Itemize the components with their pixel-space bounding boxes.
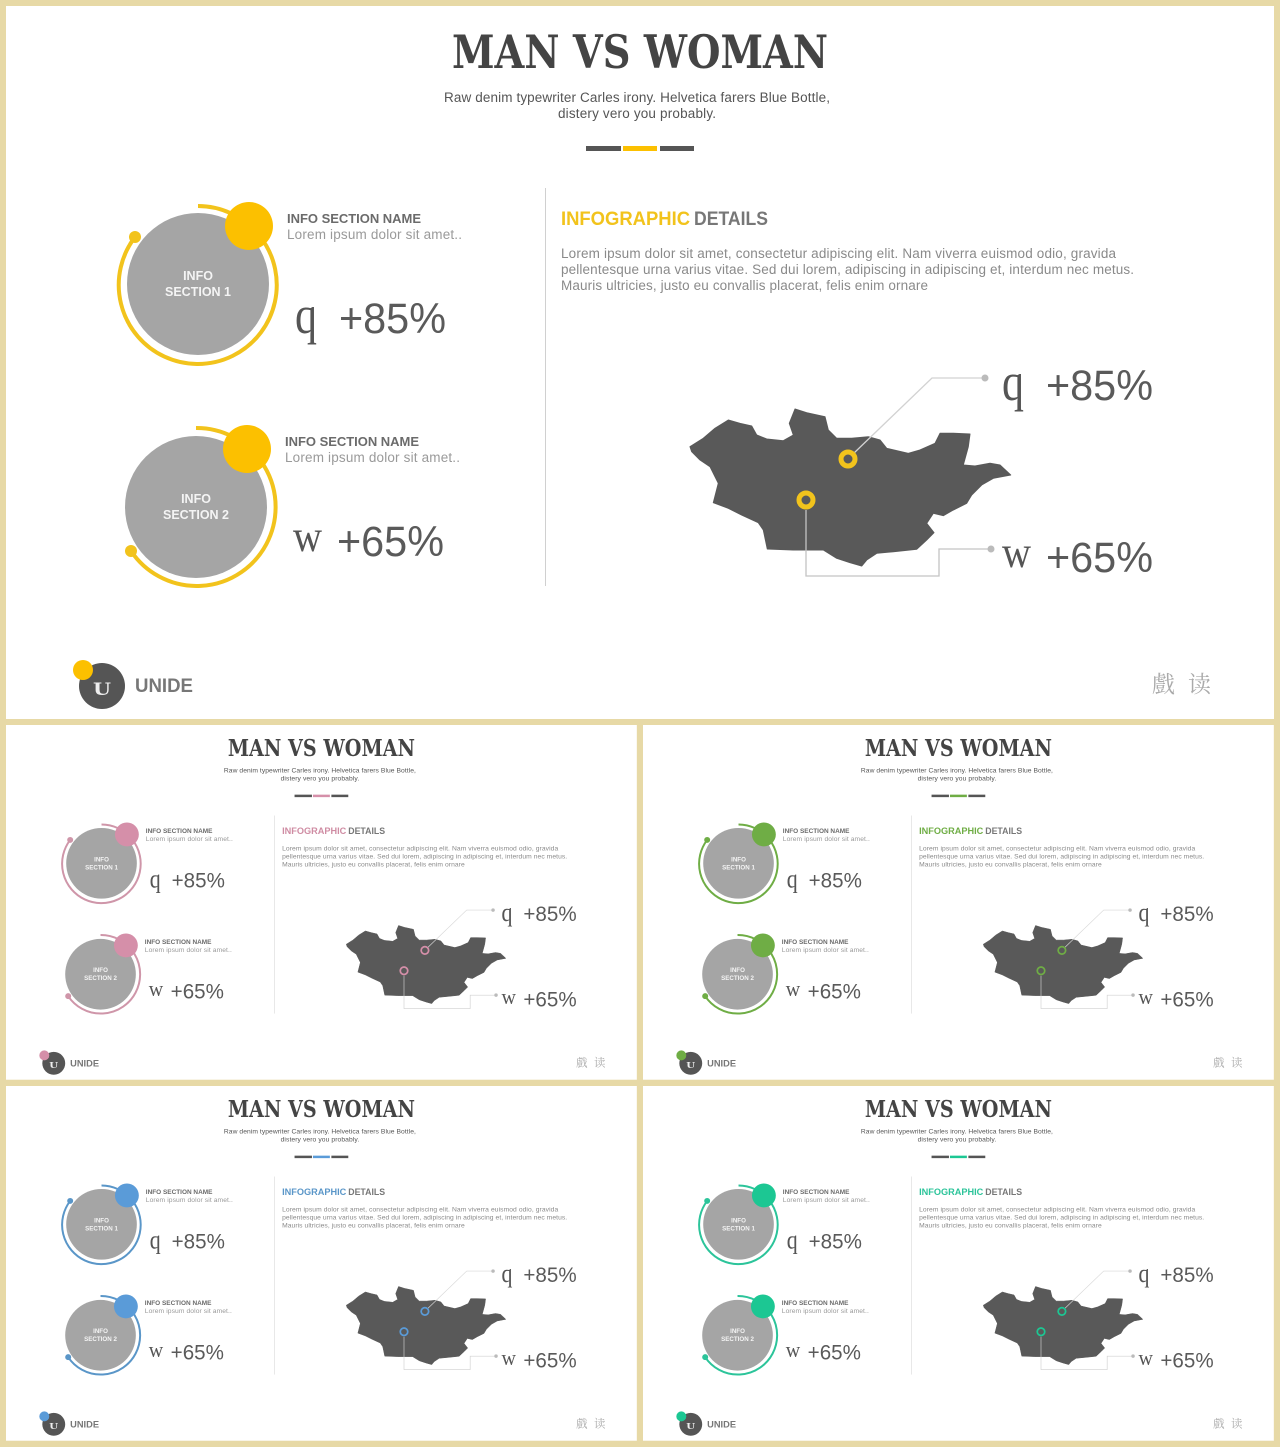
stat: q +85% (150, 864, 225, 894)
heading: infographic details (282, 826, 385, 837)
subtitle (224, 768, 416, 783)
text: section 1 name: Lorem ipsum dolor sit amet.. (783, 1197, 870, 1204)
text: section 2 name: INFO SECTION NAME (285, 434, 419, 449)
panel: yellow main slide (6, 6, 1274, 719)
text: section 2 name: INFO SECTION NAME (782, 939, 849, 946)
map stat: q +85%: q (1139, 897, 1149, 927)
text: section 2 name (782, 1300, 869, 1315)
circle: info section 1 (119, 202, 277, 364)
heading: infographic details: DETAILS (694, 209, 768, 230)
paragraph: pellentesque urna varius vitae. Sed dui lorem, adipiscing in adipiscing et, interdum nec metus. (282, 853, 567, 860)
subtitle (861, 768, 1053, 783)
map stat: q +85%: +85% (1046, 362, 1153, 410)
text: section 2 name (782, 939, 869, 954)
title accent bars (932, 795, 985, 797)
paragraph (919, 845, 1204, 868)
circle: info section 2: SECTION 2 (721, 1336, 754, 1343)
circle: info section 2: SECTION 2 (84, 975, 117, 982)
logo: UNIDE (707, 1419, 736, 1430)
map stat: w +65%: w (502, 1345, 516, 1370)
subtitle: Raw denim typewriter Carles irony. Helvetica farers Blue Bottle, (861, 1129, 1053, 1136)
stat: q +85% (787, 1225, 862, 1255)
circle: info section 2: INFO (93, 967, 108, 974)
marker: q (1058, 947, 1066, 954)
text: section 1 name: INFO SECTION NAME (146, 1189, 213, 1196)
map stat: w +65%: w (1139, 984, 1153, 1009)
subtitle (861, 1129, 1053, 1144)
text: section 1 name (287, 211, 462, 242)
stat: q +85%: +85% (339, 295, 446, 343)
stat: w +65%: +65% (337, 518, 444, 566)
map stat: q +85% (502, 1258, 577, 1288)
text: section 2 name: INFO SECTION NAME (145, 939, 212, 946)
text: section 1 name: Lorem ipsum dolor sit amet.. (146, 1197, 233, 1204)
circle: info section 1 (699, 823, 778, 903)
subtitle: Raw denim typewriter Carles irony. Helvetica farers Blue Bottle, (224, 1129, 416, 1136)
circle: info section 2: INFO (730, 967, 745, 974)
title accent bars (295, 795, 348, 797)
map stat: w +65% (1139, 1345, 1214, 1373)
footer text: 戲 读 (1213, 1415, 1243, 1431)
stat: q +85%: q (150, 1225, 161, 1255)
subtitle: distery vero you probably. (918, 1137, 996, 1144)
panel: blue slide (6, 1086, 637, 1441)
footer text: 戲 读 (576, 1054, 606, 1070)
map stat: w +65% (1139, 984, 1214, 1012)
subtitle (444, 90, 830, 121)
circle: info section 1: SECTION 1 (722, 864, 755, 871)
circle: info section 1: INFO (94, 1217, 109, 1224)
text: section 2 name: Lorem ipsum dolor sit amet.. (145, 1308, 232, 1315)
heading: infographic details (919, 826, 1022, 837)
logo (39, 1411, 99, 1436)
paragraph: Lorem ipsum dolor sit amet, consectetur adipiscing elit. Nam viverra euismod odio, gravida (919, 845, 1195, 852)
subtitle: distery vero you probably. (558, 106, 716, 121)
heading: infographic details: INFOGRAPHIC (919, 1187, 983, 1198)
stat: w +65% (293, 512, 444, 566)
marker: w (1037, 967, 1045, 974)
marker: w (799, 493, 813, 507)
circle: info section 2: INFO (181, 492, 211, 506)
callout line: q (427, 908, 495, 948)
title: MAN VS WOMAN (228, 1097, 415, 1123)
logo: U (93, 680, 111, 700)
logo: U (686, 1060, 696, 1070)
stat: q +85%: q (787, 1225, 798, 1255)
map stat: w +65%: w (502, 984, 516, 1009)
text: section 1 name: INFO SECTION NAME (287, 211, 421, 226)
circle: info section 1: SECTION 1 (722, 1225, 755, 1232)
map stat: w +65% (502, 1345, 577, 1373)
circle: info section 2: INFO (93, 1328, 108, 1335)
logo: UNIDE (70, 1058, 99, 1069)
circle: info section 1 (62, 823, 141, 903)
circle: info section 1: INFO (731, 856, 746, 863)
subtitle: Raw denim typewriter Carles irony. Helvetica farers Blue Bottle, (444, 90, 830, 105)
paragraph: Lorem ipsum dolor sit amet, consectetur adipiscing elit. Nam viverra euismod odio, gravida (561, 246, 1116, 261)
map (983, 925, 1143, 1004)
text: section 2 name: Lorem ipsum dolor sit amet.. (782, 1308, 869, 1315)
map stat: w +65%: +65% (523, 1349, 577, 1373)
map stat: q +85%: +85% (523, 902, 577, 926)
circle: info section 2 (702, 933, 777, 1014)
heading: infographic details: INFOGRAPHIC (919, 826, 983, 837)
text: section 1 name (146, 1189, 233, 1204)
paragraph: pellentesque urna varius vitae. Sed dui lorem, adipiscing in adipiscing et, interdum nec metus. (919, 1214, 1204, 1221)
circle: info section 1 (699, 1184, 778, 1264)
marker: w (400, 1328, 408, 1335)
panel: pink slide (6, 725, 637, 1080)
paragraph (282, 845, 567, 868)
logo: U (49, 1060, 59, 1070)
circle: info section 1: SECTION 1 (165, 285, 231, 299)
callout line: w (1041, 1337, 1135, 1370)
map stat: w +65%: +65% (1160, 988, 1214, 1012)
circle: info section 1 (62, 1184, 141, 1264)
stat: w +65% (149, 1337, 224, 1365)
circle: info section 2 (65, 1294, 140, 1375)
panel: teal slide (643, 1086, 1274, 1441)
paragraph: Mauris ultricies, justo eu convallis placerat, felis enim ornare (561, 278, 928, 293)
map (690, 409, 1011, 566)
text: section 1 name (783, 828, 870, 843)
map stat: q +85%: +85% (1160, 1263, 1214, 1287)
paragraph: Lorem ipsum dolor sit amet, consectetur adipiscing elit. Nam viverra euismod odio, gravida (919, 1206, 1195, 1213)
title accent bars (295, 1156, 348, 1158)
stat: q +85%: +85% (809, 869, 862, 893)
circle: info section 1: INFO (731, 1217, 746, 1224)
callout line: q (853, 374, 988, 454)
footer text: 戲 读 (1152, 666, 1211, 699)
circle: info section 2: SECTION 2 (163, 508, 229, 522)
heading: infographic details (919, 1187, 1022, 1198)
paragraph (919, 1206, 1204, 1229)
callout line: q (1064, 908, 1132, 948)
stat: w +65%: w (786, 976, 800, 1001)
callout line: q (427, 1269, 495, 1309)
title: MAN VS WOMAN (228, 736, 415, 762)
circle: info section 2: SECTION 2 (84, 1336, 117, 1343)
callout line: w (1041, 976, 1135, 1009)
map stat: q +85%: +85% (523, 1263, 577, 1287)
logo: U (49, 1421, 59, 1431)
text: section 2 name: INFO SECTION NAME (145, 1300, 212, 1307)
subtitle: distery vero you probably. (281, 776, 359, 783)
subtitle: distery vero you probably. (281, 1137, 359, 1144)
stat: w +65%: w (149, 1337, 163, 1362)
stat: w +65% (786, 1337, 861, 1365)
paragraph: pellentesque urna varius vitae. Sed dui lorem, adipiscing in adipiscing et, interdum nec metus. (282, 1214, 567, 1221)
logo: UNIDE (70, 1419, 99, 1430)
text: section 1 name: INFO SECTION NAME (783, 828, 850, 835)
callout line: w (806, 510, 994, 576)
stat: q +85% (150, 1225, 225, 1255)
heading: infographic details (282, 1187, 385, 1198)
map stat: w +65%: +65% (1160, 1349, 1214, 1373)
subtitle: distery vero you probably. (918, 776, 996, 783)
heading: infographic details: INFOGRAPHIC (282, 1187, 346, 1198)
text: section 2 name (145, 939, 232, 954)
title accent bars (586, 146, 694, 151)
stat: q +85% (787, 864, 862, 894)
paragraph: pellentesque urna varius vitae. Sed dui lorem, adipiscing in adipiscing et, interdum nec metus. (561, 262, 1134, 277)
stat: w +65%: +65% (171, 1341, 224, 1365)
panel: green slide (643, 725, 1274, 1080)
circle: info section 1: SECTION 1 (85, 1225, 118, 1232)
text: section 1 name (146, 828, 233, 843)
circle: info section 2: INFO (730, 1328, 745, 1335)
stat: q +85%: +85% (172, 869, 225, 893)
circle: info section 2: SECTION 2 (721, 975, 754, 982)
heading: infographic details: DETAILS (348, 826, 385, 837)
map stat: w +65%: +65% (1046, 534, 1153, 582)
circle: info section 2 (125, 425, 276, 586)
map stat: q +85%: +85% (1160, 902, 1214, 926)
stat: q +85% (295, 285, 446, 345)
footer text: 戲 读 (576, 1415, 606, 1431)
logo (676, 1050, 736, 1075)
logo: UNIDE (707, 1058, 736, 1069)
stat: w +65%: +65% (808, 980, 861, 1004)
callout line: w (404, 976, 498, 1009)
callout line: q (1064, 1269, 1132, 1309)
subtitle (224, 1129, 416, 1144)
stat: q +85%: +85% (809, 1230, 862, 1254)
stat: w +65%: w (293, 512, 322, 561)
circle: info section 1: INFO (183, 269, 213, 283)
paragraph (282, 1206, 567, 1229)
title: MAN VS WOMAN (865, 1097, 1052, 1123)
circle: info section 1: INFO (94, 856, 109, 863)
marker: q (1058, 1308, 1066, 1315)
circle: info section 1: SECTION 1 (85, 864, 118, 871)
stat: w +65% (786, 976, 861, 1004)
text: section 2 name: Lorem ipsum dolor sit amet.. (145, 947, 232, 954)
title: MAN VS WOMAN (452, 25, 828, 79)
stat: w +65%: +65% (808, 1341, 861, 1365)
heading: infographic details: DETAILS (348, 1187, 385, 1198)
text: section 1 name: Lorem ipsum dolor sit amet.. (287, 227, 462, 242)
map (346, 1286, 506, 1365)
paragraph (561, 246, 1134, 293)
text: section 1 name: Lorem ipsum dolor sit amet.. (783, 836, 870, 843)
heading: infographic details: INFOGRAPHIC (561, 209, 690, 230)
text: section 2 name: Lorem ipsum dolor sit amet.. (782, 947, 869, 954)
stat: q +85%: +85% (172, 1230, 225, 1254)
paragraph: Lorem ipsum dolor sit amet, consectetur adipiscing elit. Nam viverra euismod odio, gravida (282, 1206, 558, 1213)
text: section 1 name: INFO SECTION NAME (783, 1189, 850, 1196)
text: section 1 name: Lorem ipsum dolor sit amet.. (146, 836, 233, 843)
stat: w +65%: +65% (171, 980, 224, 1004)
map stat: q +85%: q (1002, 352, 1024, 412)
title accent bars (932, 1156, 985, 1158)
marker: w (400, 967, 408, 974)
map stat: q +85%: q (502, 1258, 512, 1288)
map stat: w +65% (502, 984, 577, 1012)
map (346, 925, 506, 1004)
stat: q +85%: q (295, 285, 317, 345)
map stat: w +65%: w (1139, 1345, 1153, 1370)
text: section 2 name: Lorem ipsum dolor sit amet.. (285, 450, 460, 465)
heading: infographic details: DETAILS (985, 826, 1022, 837)
paragraph: Mauris ultricies, justo eu convallis placerat, felis enim ornare (282, 1222, 465, 1229)
logo: UNIDE (135, 676, 193, 697)
title: MAN VS WOMAN (865, 736, 1052, 762)
paragraph: Lorem ipsum dolor sit amet, consectetur adipiscing elit. Nam viverra euismod odio, gravida (282, 845, 558, 852)
footer text: 戲 读 (1213, 1054, 1243, 1070)
logo (39, 1050, 99, 1075)
map stat: w +65%: w (1002, 528, 1031, 577)
marker: w (1037, 1328, 1045, 1335)
text: section 2 name (285, 434, 460, 465)
paragraph: Mauris ultricies, justo eu convallis placerat, felis enim ornare (282, 861, 465, 868)
text: section 1 name (783, 1189, 870, 1204)
text: section 1 name: INFO SECTION NAME (146, 828, 213, 835)
stat: q +85%: q (150, 864, 161, 894)
logo: U (686, 1421, 696, 1431)
map stat: q +85% (502, 897, 577, 927)
text: section 2 name (145, 1300, 232, 1315)
subtitle: Raw denim typewriter Carles irony. Helvetica farers Blue Bottle, (224, 768, 416, 775)
stat: w +65%: w (786, 1337, 800, 1362)
logo (73, 660, 193, 709)
map stat: q +85%: q (1139, 1258, 1149, 1288)
callout line: w (404, 1337, 498, 1370)
map stat: q +85% (1139, 897, 1214, 927)
map stat: q +85% (1139, 1258, 1214, 1288)
map (983, 1286, 1143, 1365)
marker: q (841, 452, 855, 466)
circle: info section 2 (702, 1294, 777, 1375)
marker: q (421, 947, 429, 954)
circle: info section 2 (65, 933, 140, 1014)
map stat: q +85%: q (502, 897, 512, 927)
map stat: w +65%: +65% (523, 988, 577, 1012)
paragraph: Mauris ultricies, justo eu convallis placerat, felis enim ornare (919, 1222, 1102, 1229)
logo (676, 1411, 736, 1436)
subtitle: Raw denim typewriter Carles irony. Helvetica farers Blue Bottle, (861, 768, 1053, 775)
stat: w +65% (149, 976, 224, 1004)
heading: infographic details: DETAILS (985, 1187, 1022, 1198)
marker: q (421, 1308, 429, 1315)
stat: q +85%: q (787, 864, 798, 894)
map stat: q +85% (1002, 352, 1153, 412)
map stat: w +65% (1002, 528, 1153, 582)
heading: infographic details: INFOGRAPHIC (282, 826, 346, 837)
stat: w +65%: w (149, 976, 163, 1001)
paragraph: pellentesque urna varius vitae. Sed dui lorem, adipiscing in adipiscing et, interdum nec metus. (919, 853, 1204, 860)
heading: infographic details (561, 209, 768, 230)
text: section 2 name: INFO SECTION NAME (782, 1300, 849, 1307)
paragraph: Mauris ultricies, justo eu convallis placerat, felis enim ornare (919, 861, 1102, 868)
